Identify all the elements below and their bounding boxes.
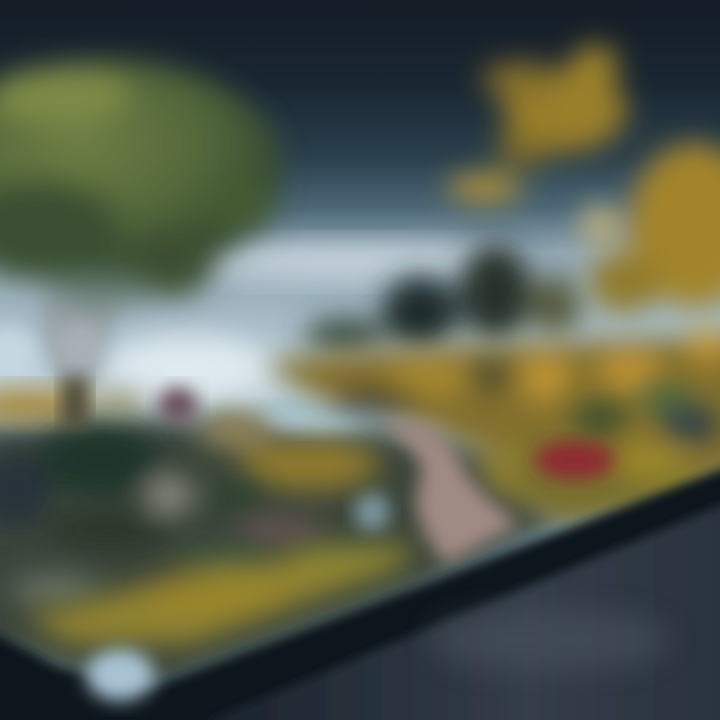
yellow tree right edge [580, 143, 720, 312]
white reflection blob [86, 649, 154, 701]
tablet dark frame [0, 462, 720, 720]
yellow tree top right [447, 45, 627, 202]
shrubs [0, 426, 325, 604]
green tree [0, 60, 283, 390]
tree canopy [0, 60, 283, 308]
flower beds right [480, 385, 720, 511]
tree trunk [38, 300, 120, 390]
ground base [0, 420, 560, 690]
tablet screen surface [210, 497, 720, 720]
water inlet [354, 492, 390, 532]
reddish shrub [158, 387, 198, 423]
trunk base [62, 378, 88, 428]
winding path [385, 422, 520, 565]
red flowers [535, 441, 615, 479]
left ground [0, 378, 415, 645]
yellow foreground strip [25, 545, 415, 645]
orange horizon field [0, 389, 100, 421]
distant dark trees [305, 244, 581, 353]
yellow fields right [265, 327, 720, 520]
yellow meadow [95, 393, 380, 491]
